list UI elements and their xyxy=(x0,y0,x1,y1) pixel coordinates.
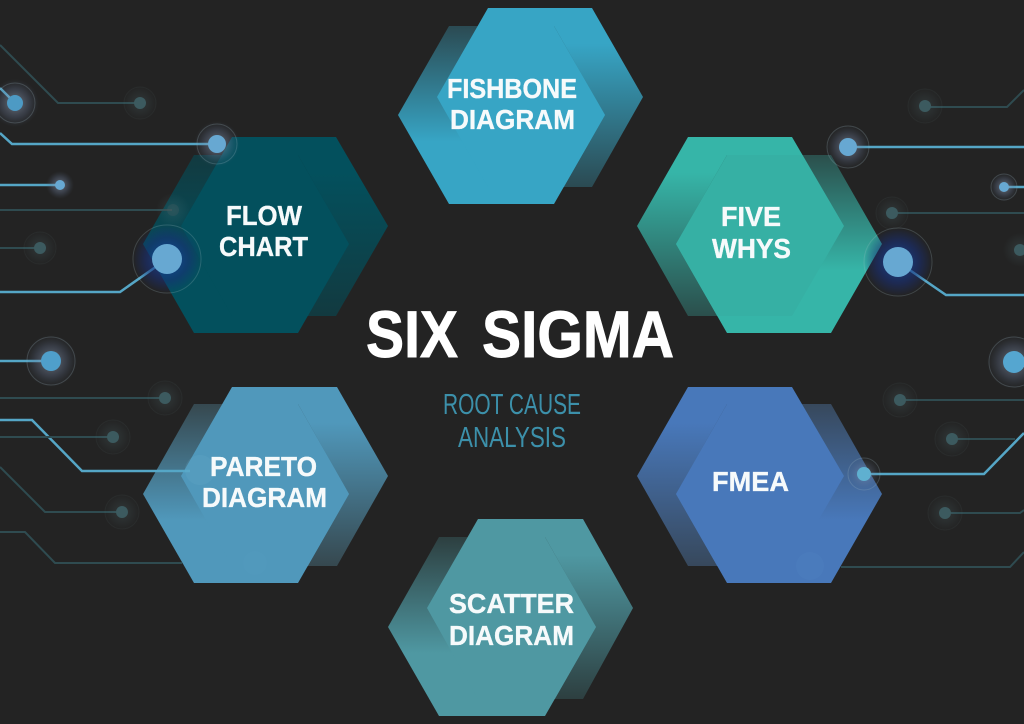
label: flow chart: FLOW xyxy=(226,200,303,231)
subtitle: ROOT CAUSE xyxy=(443,389,581,421)
label: five whys: WHYS xyxy=(712,233,791,264)
label: flow chart xyxy=(219,200,308,262)
subtitle xyxy=(443,389,581,454)
label: fishbone diagram: FISHBONE xyxy=(447,73,577,104)
label: scatter diagram xyxy=(449,588,574,651)
title xyxy=(366,297,674,371)
label: scatter diagram: SCATTER xyxy=(449,588,574,619)
label: pareto diagram: PARETO xyxy=(210,451,317,482)
title: SIX xyxy=(366,297,458,371)
subtitle: ANALYSIS xyxy=(458,422,566,454)
label: flow chart: CHART xyxy=(219,231,308,262)
label: pareto diagram xyxy=(202,451,327,513)
label: five whys: FIVE xyxy=(721,201,781,232)
hexagon: flow chart xyxy=(143,137,388,333)
label: fmea: FMEA xyxy=(712,466,789,497)
circuit lines: right xyxy=(841,90,1024,567)
hexagon: fishbone diagram xyxy=(398,8,643,204)
label: scatter diagram: DIAGRAM xyxy=(449,620,574,651)
hexagon: five whys xyxy=(637,137,882,333)
label: fishbone diagram xyxy=(447,73,577,135)
hexagon: scatter diagram xyxy=(388,519,633,716)
circuit nodes: left xyxy=(0,79,267,575)
hexagon: pareto diagram xyxy=(143,387,388,583)
circuit lines: left xyxy=(0,45,217,563)
circuit nodes: right xyxy=(796,88,1024,580)
label: fishbone diagram: DIAGRAM xyxy=(450,104,575,135)
label: five whys xyxy=(712,201,791,264)
title: SIGMA xyxy=(482,297,674,371)
hexagon: fmea xyxy=(637,387,882,583)
label: pareto diagram: DIAGRAM xyxy=(202,482,327,513)
